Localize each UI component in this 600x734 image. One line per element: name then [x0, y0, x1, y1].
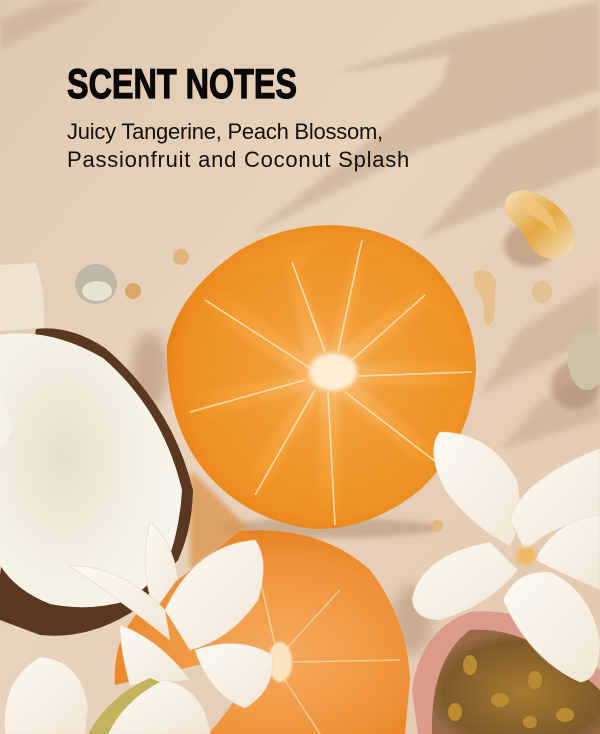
title: SCENT NOTES	[67, 60, 297, 107]
scent notes description: Juicy Tangerine, Peach Blossom,	[67, 119, 383, 144]
palm shadows	[0, 0, 600, 450]
tangerine slice main	[167, 225, 476, 529]
frangipani flower right	[412, 432, 600, 682]
scent notes description: Passionfruit and Coconut Splash	[67, 147, 410, 172]
tangerine slice lower	[115, 530, 410, 734]
water and honey droplets	[75, 190, 600, 532]
coconut chip	[0, 263, 44, 331]
coconut half	[0, 328, 193, 636]
passionfruit	[412, 611, 600, 734]
scent notes description	[67, 119, 410, 172]
frangipani flower left	[4, 522, 272, 734]
cast shadows	[132, 223, 599, 654]
